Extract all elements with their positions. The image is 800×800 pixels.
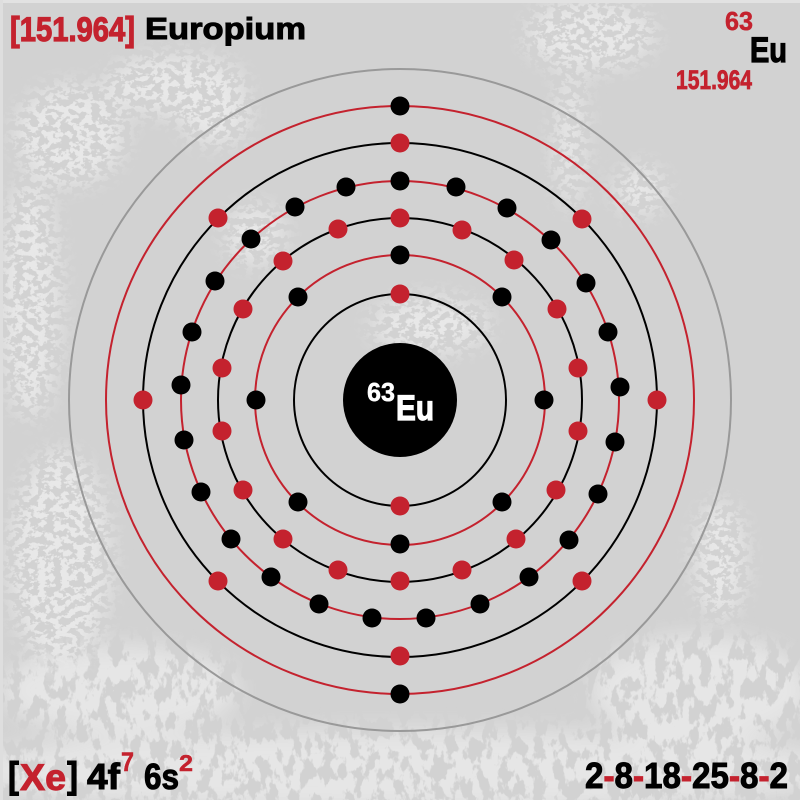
electron configuration: 6s (144, 756, 179, 797)
title: atomic weight and element name: [151.964] (10, 11, 135, 49)
electron configuration: Xe (20, 757, 66, 798)
shell 5: 8 electrons (134, 134, 666, 666)
electron configuration: 7 (121, 747, 134, 777)
nucleus: 63 (367, 377, 395, 407)
outer boundary ring (69, 69, 731, 731)
element tile: number, symbol, weight: 63 (725, 6, 753, 36)
nucleus: Eu (396, 389, 434, 428)
electron configuration: 4f (87, 756, 121, 797)
electron configuration (8, 747, 193, 798)
nucleus (343, 343, 457, 457)
shell 1: 2 electrons (294, 284, 506, 516)
element tile: number, symbol, weight: Eu (750, 31, 787, 70)
shell 6: 2 electrons (106, 96, 694, 704)
title: atomic weight and element name: Europium (145, 11, 306, 46)
atom diagram (69, 69, 731, 731)
electron configuration: [ (8, 755, 19, 796)
shell 4: 25 electrons (172, 172, 630, 628)
electron configuration: ] (67, 755, 78, 796)
element tile: number, symbol, weight: 151.964 (676, 65, 752, 95)
element tile: number, symbol, weight (676, 6, 787, 95)
electron configuration: 2 (179, 750, 193, 776)
title: atomic weight and element name (10, 11, 306, 49)
electrons per shell: 2-8-18-25-8-2 (585, 755, 788, 796)
shell 3: 18 electrons (212, 208, 588, 590)
shell 2: 8 electrons (246, 246, 554, 554)
